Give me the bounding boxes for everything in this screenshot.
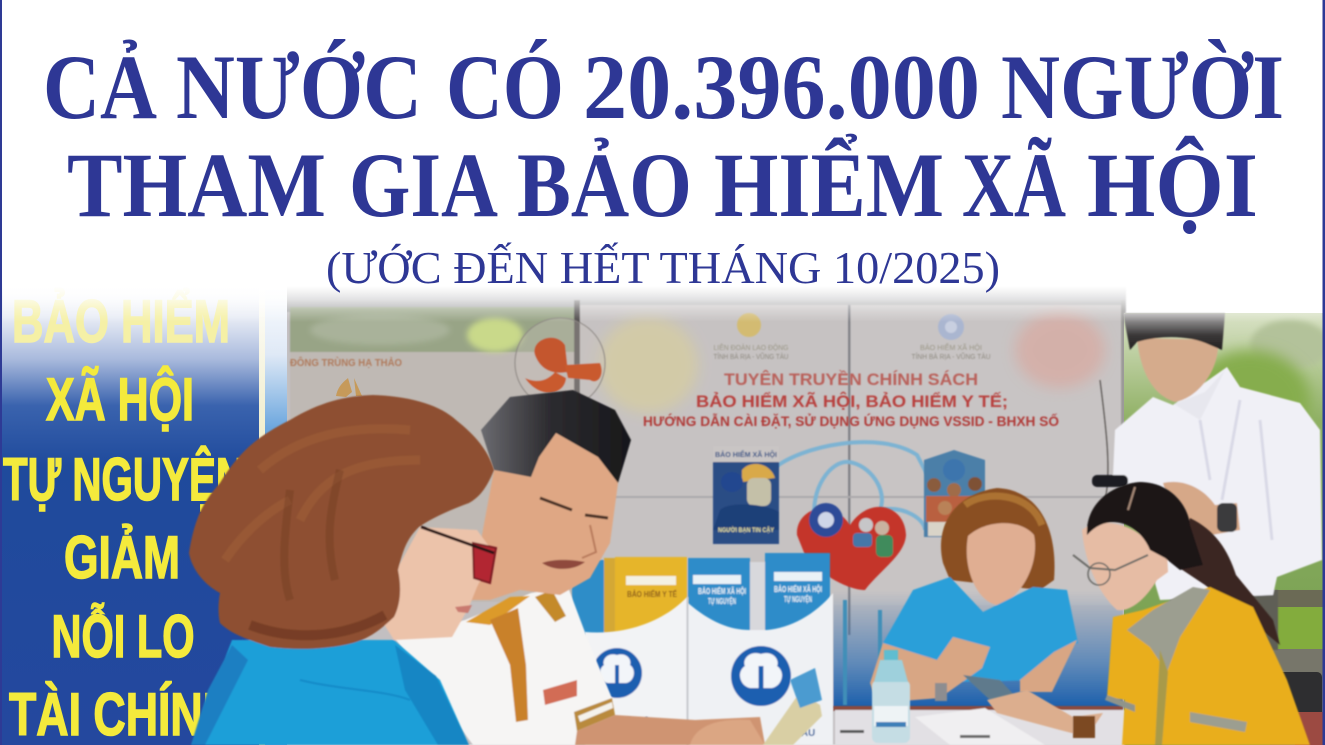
title: CẢ <box>43 36 157 138</box>
booth wall text: TỈNH BÀ RỊA - VŨNG TÀU <box>912 352 990 361</box>
man in white polo <box>394 390 822 745</box>
wall poster: worker <box>713 446 779 544</box>
title: HIỂM <box>714 134 944 236</box>
wall logo: heart and hands <box>797 503 906 590</box>
woman in blue shirt <box>870 488 1078 703</box>
title: CÓ <box>446 36 564 138</box>
wall logos <box>737 313 964 340</box>
banner slogan text: XÃ HỘI <box>46 366 194 433</box>
right border line <box>1322 0 1325 745</box>
brochures: TỰ NGUYỆN <box>708 597 736 606</box>
brochures: BẢO HIỂM Y TẾ <box>627 589 678 599</box>
title: NƯỚC <box>176 36 422 138</box>
booth wall text: TỈNH BÀ RỊA - VŨNG TÀU <box>714 352 788 361</box>
woman with brown hair <box>189 395 496 745</box>
orange fan <box>515 318 605 408</box>
desk and papers <box>833 706 1125 745</box>
booth wall text: HƯỚNG DẪN CÀI ĐẶT, SỬ DỤNG ỨNG DỤNG VSSID - BHXH SỐ <box>643 412 1059 429</box>
girl in yellow shirt <box>987 482 1310 745</box>
brochure boxes with logos: TÀU <box>795 726 815 739</box>
banner slogan text: NỖI LO <box>52 603 194 670</box>
booth wall text: LIÊN ĐOÀN LAO ĐỘNG <box>714 343 789 352</box>
wall poster: worker: BẢO HIỂM XÃ HỘI <box>715 450 777 459</box>
left border line <box>0 0 2 745</box>
wall poster: family <box>924 450 985 537</box>
standing man <box>1092 313 1322 650</box>
brochures: TỰ NGUYỆN <box>784 595 812 604</box>
wall poster: worker: NGƯỜI BẠN TIN CẬY <box>718 526 774 534</box>
water bottle <box>872 650 910 743</box>
wall emblem outline <box>772 442 930 705</box>
flame mark <box>336 378 362 397</box>
brochure boxes with logos: VŨNG TÀU <box>616 728 668 741</box>
booth wall text: BẢO HIỂM XÃ HỘI, BẢO HIỂM Y TẾ; <box>696 391 1008 411</box>
booth wall background <box>286 280 1126 745</box>
banner slogan text: TỰ NGUYỆN <box>3 446 245 513</box>
brochures: BẢO HIỂM XÃ HỘI <box>698 587 746 596</box>
title: NGƯỜI <box>1001 36 1284 138</box>
top fade into white <box>3 276 1322 322</box>
banner slogan text <box>3 288 245 745</box>
booth wall text: ĐÔNG TRÙNG HẠ THẢO <box>290 356 402 369</box>
booth wall text: TUYÊN TRUYỀN CHÍNH SÁCH <box>724 370 978 389</box>
title: GIA <box>349 134 498 236</box>
booth wall text: BẢO HIỂM XÃ HỘI <box>920 343 982 352</box>
title: XÃ <box>962 134 1066 236</box>
title <box>43 36 1284 236</box>
booth wall text <box>290 343 1059 429</box>
outdoor greenery, right <box>1124 313 1325 745</box>
brochures <box>572 553 830 635</box>
title: BẢO <box>517 134 692 236</box>
subtitle: (ƯỚC ĐẾN HẾT THÁNG 10/2025) <box>326 241 1000 293</box>
brochures: BẢO HIỂM XÃ HỘI <box>774 585 822 594</box>
left blue banner <box>0 280 287 745</box>
banner slogan text: GIẢM <box>64 524 180 591</box>
brochure boxes with logos: XÃ HỘI <box>619 716 653 729</box>
title: 20.396.000 <box>583 36 980 138</box>
brochure boxes with logos <box>585 593 833 745</box>
banner slogan text: BẢO HIỂM <box>12 288 230 355</box>
title: THAM <box>67 134 326 236</box>
title: HỘI <box>1087 134 1258 236</box>
photo: booth scene <box>0 276 1325 745</box>
